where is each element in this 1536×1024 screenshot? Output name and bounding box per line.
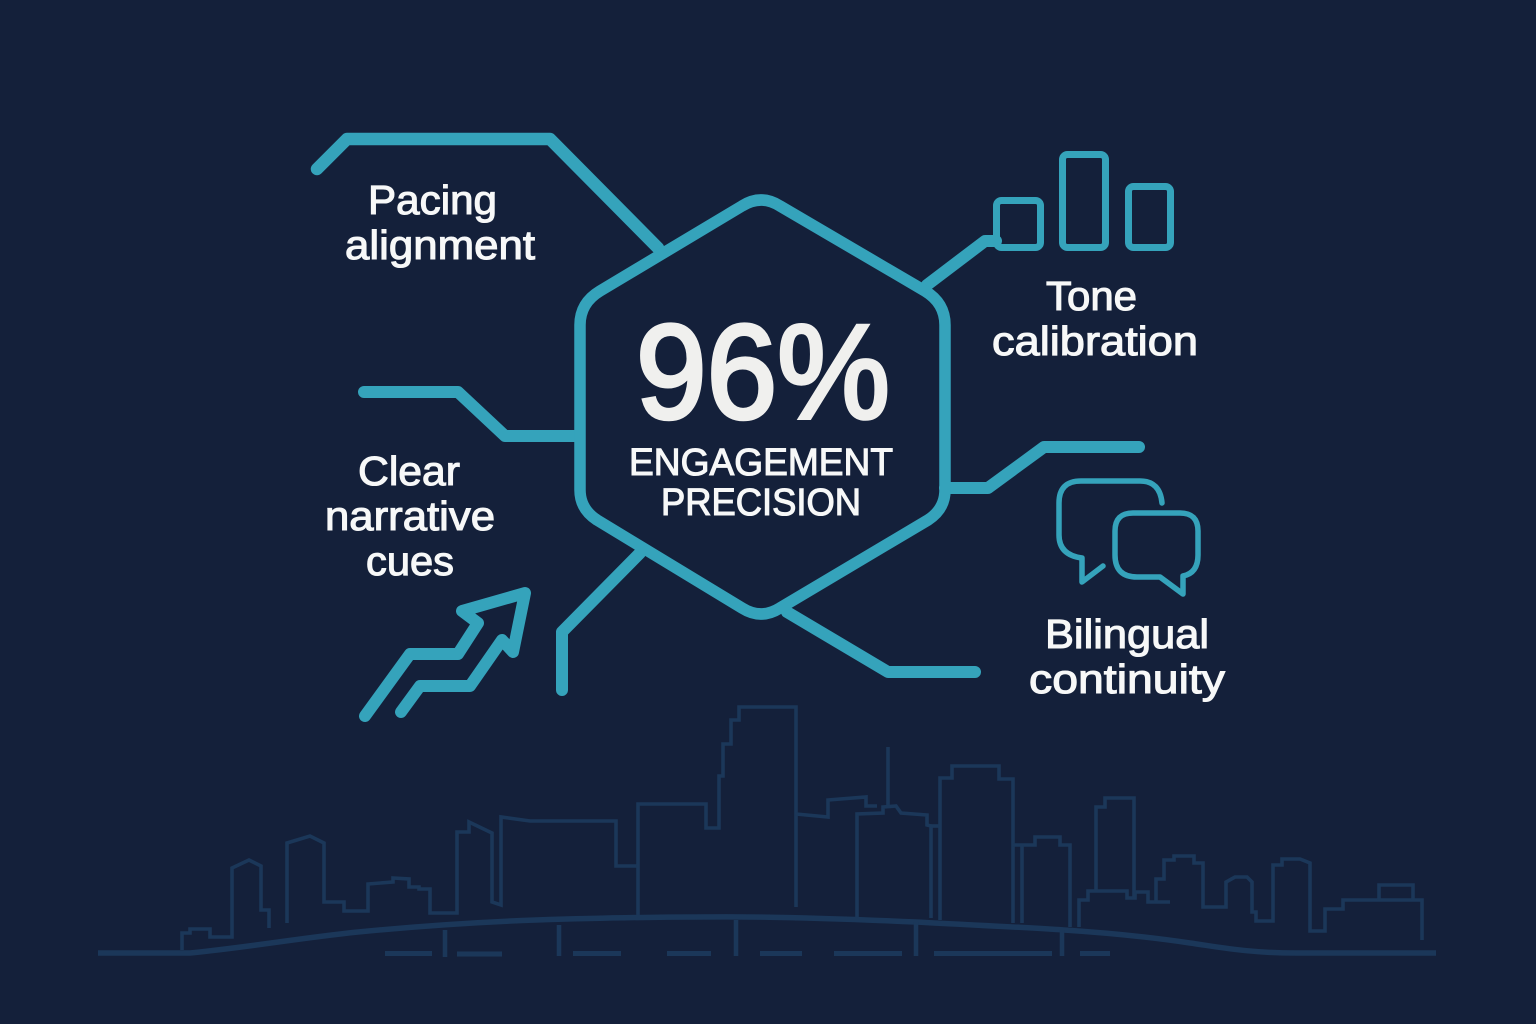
label: clear narrative cues: cues xyxy=(366,538,454,584)
label: tone calibration xyxy=(992,273,1198,364)
central metric: 96%: 96% xyxy=(636,298,890,447)
label: pacing alignment: alignment xyxy=(345,222,536,268)
central caption xyxy=(629,442,893,524)
label: tone calibration: Tone xyxy=(1046,273,1137,319)
label: bilingual continuity: continuity xyxy=(1029,656,1226,702)
central hexagon xyxy=(580,200,945,614)
label: clear narrative cues: narrative xyxy=(325,493,495,539)
central caption: ENGAGEMENT xyxy=(629,442,893,484)
label: pacing alignment: Pacing xyxy=(368,177,497,223)
label: bilingual continuity: Bilingual xyxy=(1045,611,1209,657)
label: clear narrative cues: Clear xyxy=(358,448,460,494)
icon: bar chart xyxy=(996,154,1170,248)
skyline and bridge xyxy=(98,707,1436,957)
central caption: PRECISION xyxy=(661,482,861,524)
label: tone calibration: calibration xyxy=(992,318,1198,364)
icon: speech bubbles xyxy=(1059,481,1198,594)
bridge piers xyxy=(445,920,1062,957)
connector: clear narrative cues xyxy=(364,392,578,436)
label: clear narrative cues xyxy=(325,448,495,584)
connector: chat icon xyxy=(945,447,1139,488)
connector: bilingual continuity xyxy=(787,612,975,672)
bridge road xyxy=(98,917,1436,953)
label: pacing alignment xyxy=(345,177,536,268)
label: bilingual continuity xyxy=(1029,611,1226,702)
icon: rising arrow xyxy=(365,593,525,716)
connector: pacing alignment xyxy=(317,139,658,248)
connector: tone bars xyxy=(927,241,996,285)
connector: growth arrow xyxy=(562,553,640,690)
bridge deck dashes xyxy=(385,951,1110,956)
